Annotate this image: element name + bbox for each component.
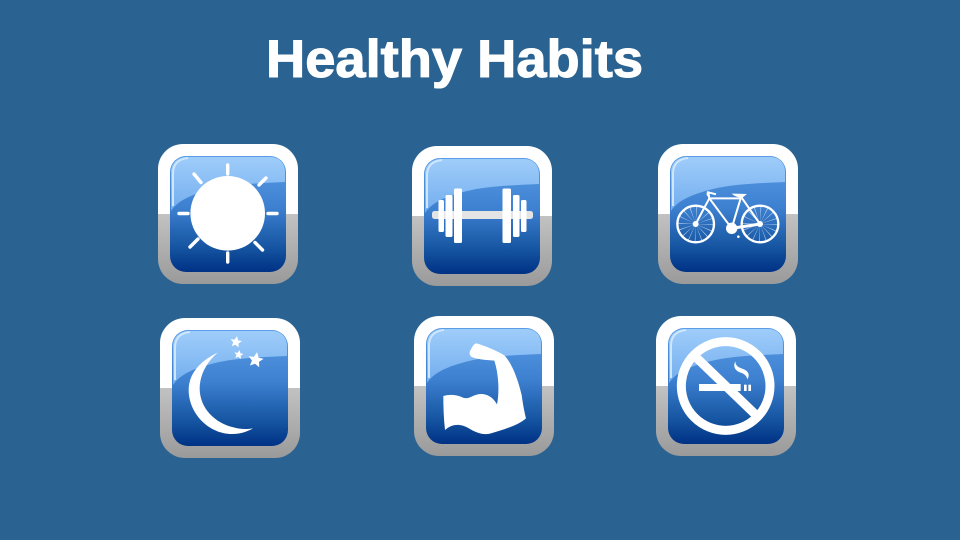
flexed arm bbox=[443, 343, 526, 434]
bicycle bbox=[677, 192, 778, 242]
icon: no smoking button bbox=[656, 316, 796, 456]
crescent moon bbox=[189, 353, 253, 434]
icon: dumbbell button bbox=[412, 146, 552, 286]
icon: moon and stars button bbox=[160, 318, 300, 458]
icon: sun button bbox=[158, 144, 298, 284]
cigarette bbox=[699, 384, 751, 391]
icon: bicycle button bbox=[658, 144, 798, 284]
no smoking sign bbox=[681, 342, 770, 430]
prohibition ring bbox=[681, 342, 770, 430]
dumbbell bbox=[432, 188, 533, 243]
sun rays bbox=[179, 165, 277, 262]
sun disc bbox=[190, 176, 265, 251]
stars bbox=[230, 335, 265, 368]
icon: flexed arm button bbox=[414, 316, 554, 456]
title: Healthy Habits bbox=[266, 30, 643, 89]
smoke bbox=[734, 361, 749, 379]
